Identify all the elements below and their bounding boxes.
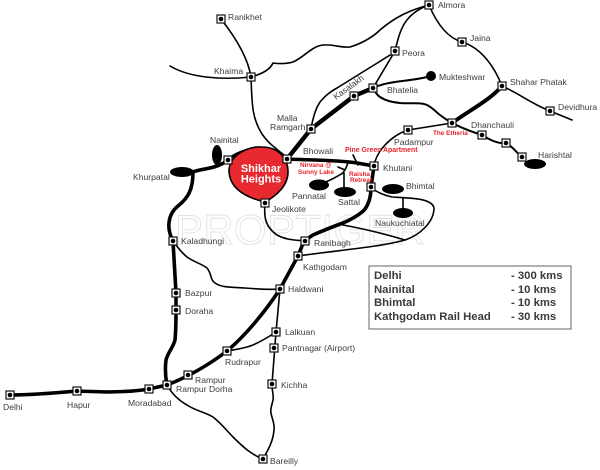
place labels: Moradabad — [128, 398, 172, 408]
lake: Mukteshwar — [426, 71, 436, 81]
place labels: Ranikhet — [228, 12, 263, 22]
project labels — [298, 130, 468, 184]
lake: Harishtal — [524, 159, 546, 169]
place labels: Almora — [438, 0, 465, 10]
place labels: Bhatelia — [387, 85, 418, 95]
place labels: Jeolikote — [272, 204, 306, 214]
lake: Pannatal — [309, 180, 329, 190]
project labels: Pine Green Apartment — [345, 147, 418, 154]
lake: Nainital — [212, 145, 222, 165]
distance table: - 10 kms — [511, 297, 556, 309]
place labels: Naukuchiatal — [375, 218, 425, 228]
place labels: Bareilly — [270, 456, 299, 466]
lake: Naukuchiatal — [393, 208, 413, 218]
project labels: Nirvana @ — [300, 162, 331, 169]
place labels: Hapur — [67, 400, 91, 410]
medium roads — [373, 76, 522, 157]
project labels: The Etheria — [433, 130, 468, 137]
place labels: Bhimtal — [406, 181, 435, 191]
place labels: Kichha — [281, 380, 307, 390]
project labels: Retreat — [350, 177, 373, 184]
place labels: Khurpatal — [133, 172, 170, 182]
place labels: Malla — [277, 113, 298, 123]
place labels: Mukteshwar — [439, 72, 485, 82]
place labels: Peora — [402, 48, 425, 58]
project labels: Sunny Lake — [298, 169, 334, 176]
place labels: Kathgodam — [303, 262, 347, 272]
place labels: Lalkuan — [285, 327, 315, 337]
distance table: Nainital — [374, 284, 415, 296]
place labels: Rudrapur — [225, 357, 261, 367]
place labels: Haldwani — [288, 284, 323, 294]
watermark: PROPTIGER — [175, 206, 425, 253]
place labels: Delhi — [3, 402, 23, 412]
distance table: - 300 kms — [511, 270, 562, 282]
lake: Khurpatal — [170, 167, 194, 177]
place labels: Shahar Phatak — [510, 77, 568, 87]
place labels: Bazpur — [185, 288, 212, 298]
place labels: Rampur Dorha — [176, 384, 233, 394]
distance table — [369, 266, 571, 329]
place labels: Jaina — [470, 33, 491, 43]
distance table: - 10 kms — [511, 284, 556, 296]
thick roads — [10, 86, 502, 395]
place labels: Doraha — [185, 306, 213, 316]
Shikhar Heights marker: Shikhar — [241, 163, 282, 175]
distance table: Kathgodam Rail Head — [374, 311, 491, 323]
lake: Sattal — [334, 187, 356, 197]
place labels: Ranibagh — [314, 238, 351, 248]
place labels: Pantnagar (Airport) — [282, 343, 355, 353]
place labels: Kasalakh — [331, 73, 366, 102]
distance table: Delhi — [374, 270, 402, 282]
place labels: Khaima — [214, 66, 243, 76]
lake: Bhimtal — [382, 184, 404, 194]
place labels: Pannatal — [292, 191, 326, 201]
distance table: - 30 kms — [511, 311, 556, 323]
lakes — [170, 71, 546, 218]
place labels: Ramgarh — [270, 122, 306, 132]
Shikhar Heights marker: Heights — [241, 174, 281, 186]
Shikhar Heights marker — [229, 147, 288, 202]
place labels: Devidhura — [558, 102, 597, 112]
place labels: Khutani — [383, 163, 412, 173]
distance table: Bhimtal — [374, 297, 415, 309]
place labels: Padampur — [394, 137, 434, 147]
place labels: Nainital — [210, 135, 239, 145]
place labels: Sattal — [338, 197, 360, 207]
thin roads — [167, 5, 572, 459]
place labels: Harishtal — [538, 150, 572, 160]
project labels: Raisha — [349, 171, 370, 178]
place labels: Rampur — [195, 375, 226, 385]
place labels: Kaladhungi — [181, 236, 224, 246]
place labels: Dhanchauli — [471, 120, 514, 130]
place labels: Bhowali — [303, 146, 333, 156]
